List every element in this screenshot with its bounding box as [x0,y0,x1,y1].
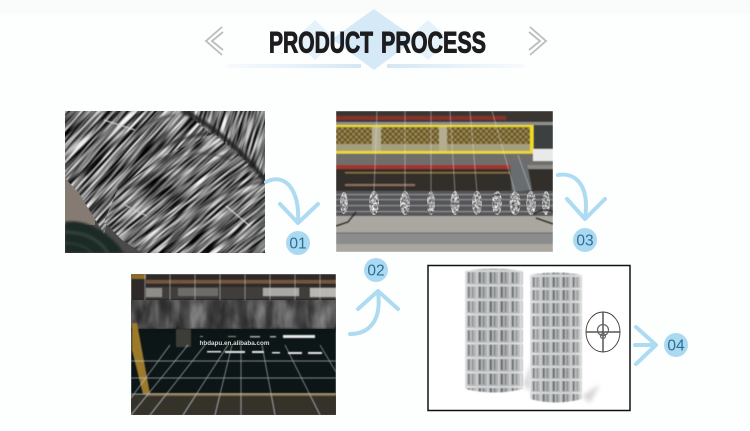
watermark: hbdapu.en.alibaba.com [200,340,270,347]
icon: left chevrons [206,27,223,55]
step badge 03: 03 [576,232,594,250]
icon: right chevrons [529,27,546,55]
photo: welding machine [131,274,336,415]
step badge 02 [364,258,388,282]
arrow: step 04 [635,327,656,364]
icon: weld detail [586,312,620,352]
arrow: step 02 [350,291,398,334]
photo: fence weaving machine [336,111,553,252]
arrow: step 01 [266,179,318,223]
title underline [228,64,524,68]
step badge 04: 04 [667,338,685,354]
step badge 02: 02 [367,262,385,280]
arrow: step 03 [558,175,605,219]
step badge 04 [664,333,688,357]
heading: PROCESS [381,26,486,60]
photo: finished mesh rolls [428,266,630,410]
mesh roll right [530,272,582,402]
step badge 01 [286,231,310,255]
title banner [206,9,546,70]
mesh roll left [465,268,523,392]
step badge 03 [573,228,597,252]
step badge 01: 01 [289,236,307,252]
roll shadows [523,362,600,403]
heading: PRODUCT [269,26,373,60]
photo: wire coils [65,111,265,253]
title diamonds [294,9,450,70]
